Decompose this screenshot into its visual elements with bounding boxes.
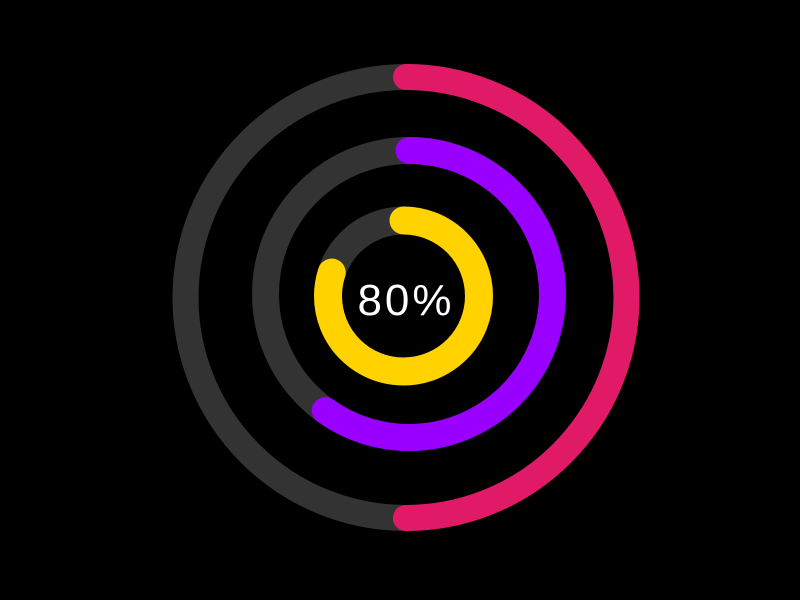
outer ring: pink 50% [186, 77, 626, 518]
middle ring: purple 60% [266, 150, 552, 438]
inner ring: yellow 80% [328, 220, 479, 372]
center label: 80% [357, 276, 455, 325]
